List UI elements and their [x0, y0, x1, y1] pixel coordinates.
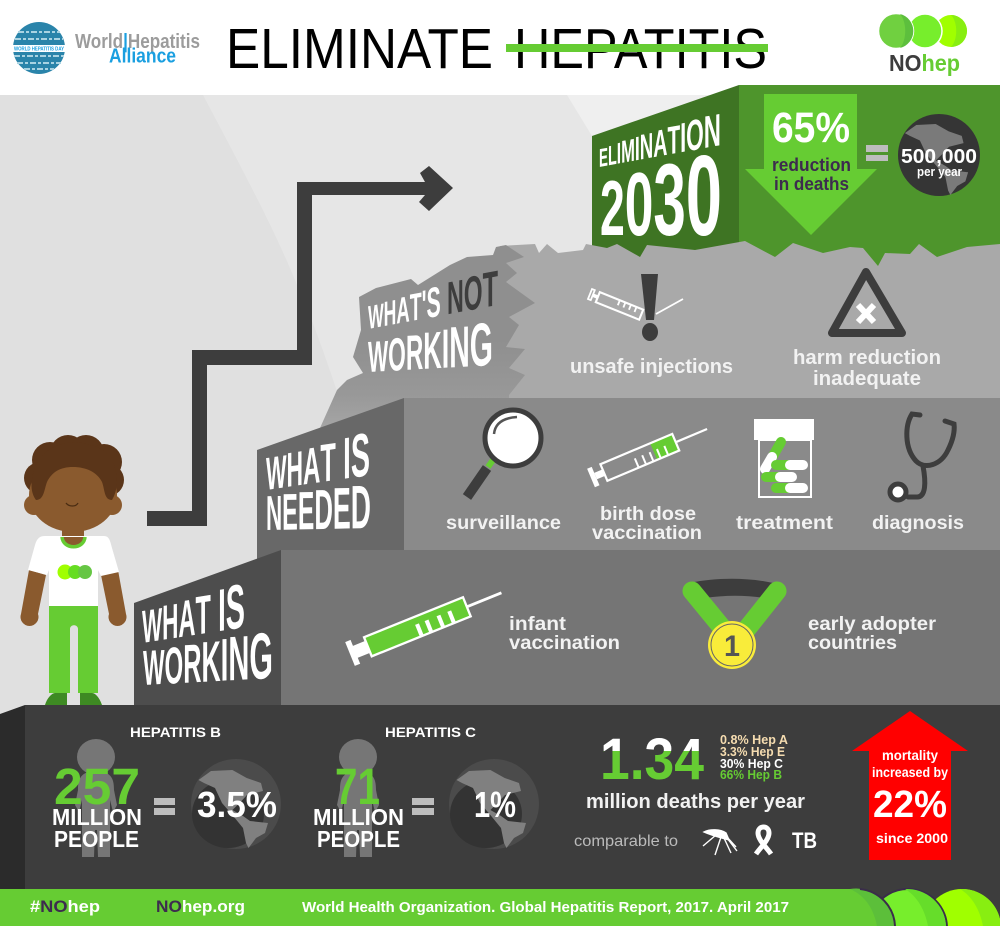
- globe: 500,000 per year: [898, 114, 980, 196]
- text: treatment: treatment: [736, 513, 834, 534]
- text: birth dose vaccination: birth dose: [600, 504, 696, 525]
- icon: ribbon: [756, 827, 771, 854]
- red arrow: mortality increased: increased by: [872, 764, 948, 780]
- label: WHAT IS (working): WHAT IS: [142, 571, 245, 657]
- globe: 1 percent: 1%: [474, 784, 516, 825]
- icon: exclamation mark: [641, 274, 683, 341]
- label: ELIMINATION: ELIMINATION: [599, 103, 721, 177]
- label: 2030: 2030: [600, 133, 722, 260]
- text: infant vaccination: [509, 614, 620, 654]
- equals sign: [412, 798, 434, 815]
- label: NEEDED: NEEDED: [266, 473, 371, 543]
- globe: 3.5 percent: 3.5%: [197, 784, 277, 825]
- arrow: 65 percent reduction: [745, 94, 877, 235]
- stat: 257 million people: PEOPLE: [54, 826, 139, 852]
- footer band: [0, 889, 1000, 926]
- shoes: [45, 693, 102, 705]
- text: birth dose vaccination: [592, 504, 702, 544]
- text: harm reduction inadequate: inadequate: [813, 368, 921, 390]
- stat: 71 million people: [313, 758, 404, 852]
- text: infant vaccination: vaccination: [509, 633, 620, 654]
- globe: 500,000 per year: 500,000: [901, 146, 977, 168]
- header logo: World Hepatitis Alliance: [75, 31, 200, 68]
- title: ELIMINATE: [226, 17, 493, 81]
- source: World Health Organization. Global Hepatitis Report, 2017. April 2017: [302, 900, 789, 916]
- panel: what is working step: [134, 550, 1000, 706]
- breakdown list: [720, 732, 789, 782]
- icon: mosquito: [703, 830, 737, 855]
- text: early adopter countries: [808, 614, 937, 654]
- breakdown list: 30% Hep C: [720, 756, 784, 771]
- stat: hepatitis C heading: HEPATITIS C: [385, 724, 476, 740]
- stat: 257 million people: [52, 758, 142, 852]
- icon: stethoscope: [890, 414, 954, 500]
- text: infant vaccination: infant: [509, 614, 567, 635]
- icon: medal: 1: [724, 630, 740, 663]
- smile: [66, 503, 78, 506]
- label: WHAT IS (needed): WHAT IS: [266, 420, 370, 504]
- hair front: [32, 442, 117, 500]
- text: million deaths per year: million deaths per year: [586, 791, 805, 813]
- hair back: [24, 435, 124, 496]
- trousers: [49, 606, 98, 693]
- stat: 71 million people: 71: [335, 758, 380, 815]
- staircase arrow: [147, 166, 453, 526]
- website: NOhep.org: [156, 897, 245, 916]
- equals sign: [866, 145, 888, 161]
- text: surveillance: surveillance: [446, 513, 561, 534]
- text: unsafe injections: unsafe injections: [570, 356, 733, 378]
- NOhep logo: [878, 14, 967, 76]
- panel: Elimination 2030 block: [592, 85, 1000, 270]
- shirt: [28, 536, 119, 606]
- shirt logo: [58, 564, 92, 580]
- person illustration: [20, 435, 127, 705]
- icon: magnifying glass: [467, 410, 541, 497]
- globe: 3.5 percent: [191, 759, 281, 849]
- title: HEPATITIS: [514, 17, 767, 81]
- icon: infant vaccination syringe: [345, 581, 506, 666]
- arrow: 65 percent reduction: in deaths: [774, 173, 849, 194]
- red arrow: mortality increased: since 2000: [876, 830, 948, 846]
- stat: 257 million people: 257: [54, 758, 140, 815]
- header logo: World Hepatitis Day: [13, 22, 65, 74]
- text: harm reduction inadequate: harm reduction: [793, 347, 941, 369]
- stat: 257 million people: MILLION: [52, 804, 142, 830]
- arms: [20, 570, 127, 626]
- hashtag: #NOhep: [30, 897, 100, 916]
- red arrow: mortality increased: [852, 711, 968, 860]
- breakdown list: 66% Hep B: [720, 767, 782, 782]
- text: birth dose vaccination: vaccination: [592, 523, 702, 544]
- globe: 1 percent: [449, 759, 539, 849]
- text: early adopter countries: countries: [808, 633, 897, 654]
- panel: what is needed step: [257, 398, 1000, 560]
- icon: warning triangle: [832, 272, 902, 333]
- NOhep logo: NOhep: [889, 50, 960, 76]
- stat: 1.34: 1.34: [600, 727, 704, 792]
- person silhouette: hepatitis C: [337, 739, 379, 857]
- breakdown list: 0.8% Hep A: [720, 732, 789, 747]
- title: [226, 17, 768, 81]
- stat: 71 million people: PEOPLE: [317, 826, 400, 852]
- arrow: 65 percent reduction: reduction: [772, 154, 851, 175]
- collar: [62, 537, 85, 547]
- face and neck: [24, 458, 122, 545]
- text: TB: TB: [792, 828, 817, 853]
- person silhouette: hepatitis B: [75, 739, 117, 857]
- text: diagnosis: diagnosis: [872, 513, 964, 534]
- icon: unsafe syringe: [588, 289, 643, 320]
- text: comparable to: comparable to: [574, 833, 678, 850]
- red arrow: mortality increased: 22%: [873, 784, 947, 826]
- label: WORKING (not working): WORKING: [368, 310, 493, 385]
- panel: what's not working rock: [320, 241, 1000, 428]
- equals sign: [154, 798, 175, 815]
- icon: pill bottle: [754, 419, 814, 497]
- red arrow: mortality increased: mortality: [882, 747, 938, 763]
- label: WORKING: WORKING: [143, 619, 273, 699]
- icon: medal: [690, 579, 780, 669]
- globe: 500,000 per year: per year: [917, 164, 962, 179]
- text: harm reduction inadequate: [793, 347, 941, 390]
- label: WHAT'S NOT: WHAT'S NOT: [368, 259, 498, 340]
- panel: statistics base: [0, 705, 1000, 926]
- breakdown list: 3.3% Hep E: [720, 744, 785, 759]
- stat: hepatitis B heading: HEPATITIS B: [130, 724, 221, 740]
- icon: birth dose syringe: [587, 420, 711, 487]
- arrow: 65 percent reduction: 65%: [772, 104, 850, 152]
- stat: 71 million people: MILLION: [313, 804, 404, 830]
- header logo: World Hepatitis Day: WORLD HEPATITIS DAY: [14, 46, 65, 52]
- header logo: World Hepatitis Alliance: Alliance: [109, 46, 176, 68]
- text: early adopter countries: early adopter: [808, 614, 937, 635]
- header logo: World Hepatitis Alliance: World|Hepatitis: [75, 31, 200, 53]
